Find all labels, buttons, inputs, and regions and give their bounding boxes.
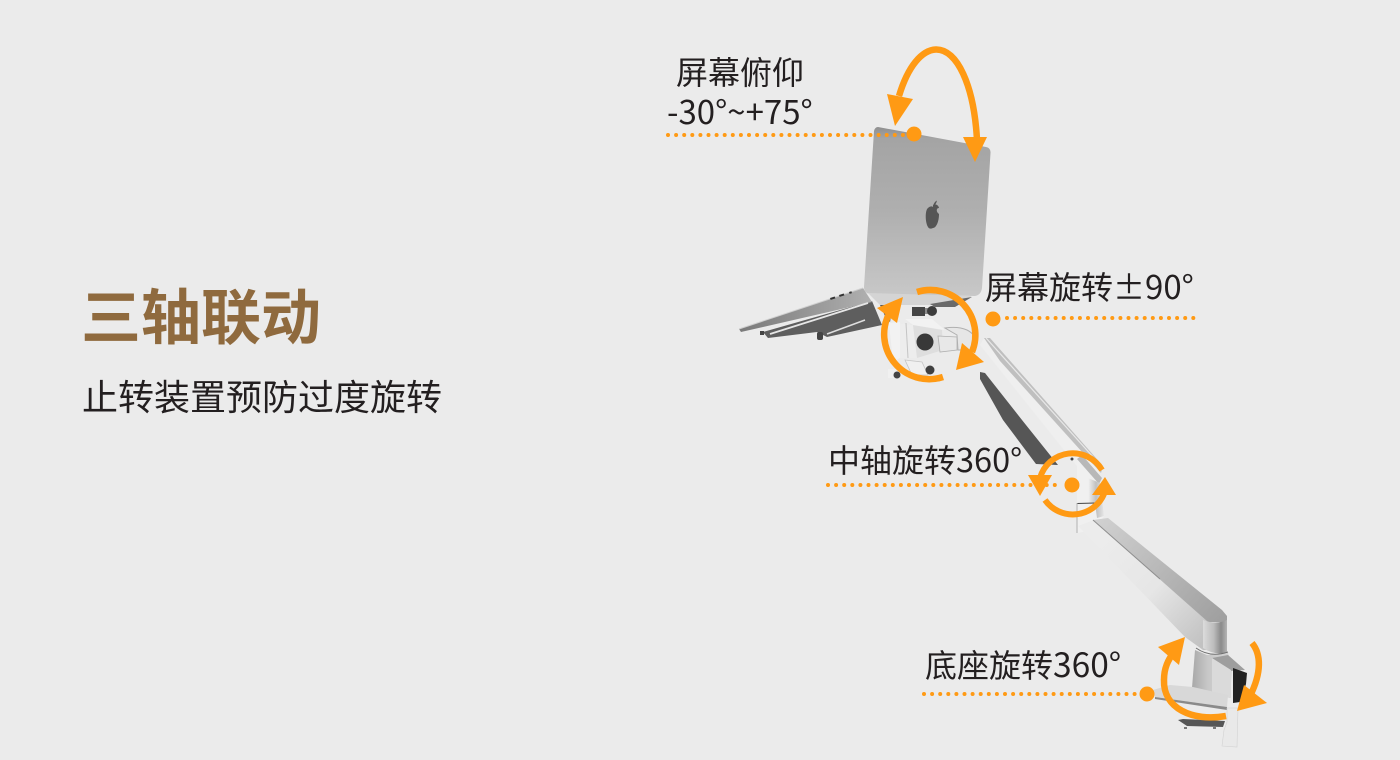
label: screen tilt xyxy=(667,48,922,142)
label: middle axis rotation: 中轴旋转360° xyxy=(828,435,1022,482)
monitor head joint xyxy=(880,305,976,378)
laptop xyxy=(739,127,991,340)
middle joint xyxy=(1070,452,1104,533)
title: 三轴联动 xyxy=(81,270,321,357)
label: middle axis rotation xyxy=(828,435,1080,492)
callout: base rotation arrows xyxy=(1158,637,1267,717)
label: base rotation: 底座旋转360° xyxy=(925,638,1121,687)
desk base and clamp xyxy=(1153,648,1247,747)
subtitle: 止转装置预防过度旋转 xyxy=(82,369,442,421)
laptop lid xyxy=(864,127,991,296)
laptop base xyxy=(739,288,882,340)
dark slot xyxy=(980,372,1058,465)
callout: middle axis arrows xyxy=(1028,453,1116,514)
label: screen tilt: -30°~+75° xyxy=(667,86,813,134)
label: base rotation xyxy=(924,638,1154,702)
label: screen rotation: 屏幕旋转±90° xyxy=(985,261,1194,309)
callout: screen rotation arrows xyxy=(877,290,984,379)
apple logo xyxy=(926,200,939,229)
upper arm xyxy=(980,338,1103,480)
callout: tilt arrows xyxy=(887,49,987,162)
lower arm xyxy=(1078,518,1227,653)
label: screen tilt: 屏幕俯仰 xyxy=(676,48,804,94)
hinge strip xyxy=(868,293,972,305)
